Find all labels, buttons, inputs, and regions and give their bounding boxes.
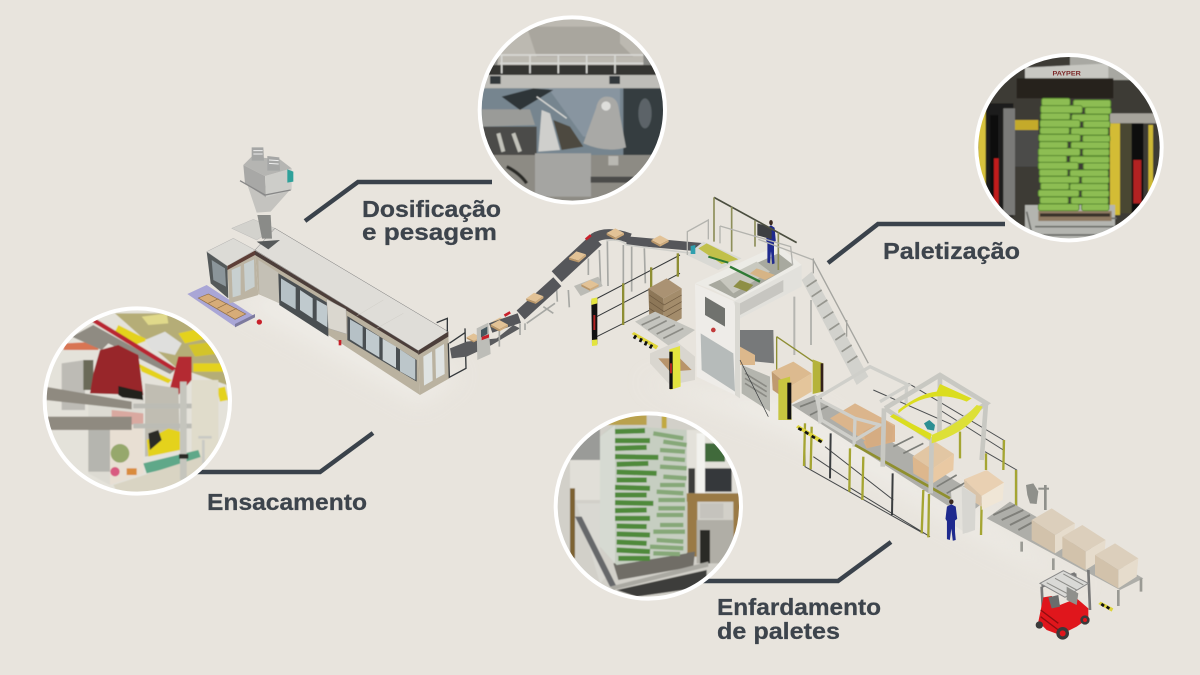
callout: Dosificação e pesagem (305, 182, 501, 245)
photo: bagging line with bags (42, 307, 238, 497)
label: Paletização (883, 238, 1020, 264)
empty pallet stack (648, 278, 682, 328)
label: Dosificação (362, 196, 501, 222)
conveyor section (450, 325, 520, 358)
hazard stripe floor marker (632, 332, 658, 349)
bag on conveyor (492, 317, 509, 329)
control cabinet (951, 486, 976, 534)
label second line: e pesagem (362, 219, 497, 245)
ground shadows (230, 285, 1090, 590)
hazard stripes (796, 425, 823, 443)
enclosure right end face (418, 332, 449, 395)
forklift truck (1036, 570, 1090, 640)
safety fence lower (805, 427, 930, 537)
red sensors (504, 234, 592, 317)
right column bags (650, 433, 687, 554)
top press frame (817, 367, 908, 447)
label second line: de paletes (717, 618, 840, 644)
support legs (499, 240, 645, 347)
grey railing (687, 220, 813, 265)
yellow side rail (855, 445, 950, 498)
upper fence back (870, 367, 1017, 507)
photo border (45, 308, 230, 494)
photo: dosing and weighing machine (477, 13, 670, 210)
bagging and weighing line machine (187, 147, 520, 395)
roof panel seams (357, 300, 403, 328)
belt sections (491, 234, 702, 328)
callout: Enfardamento de paletes (700, 542, 891, 644)
callout: Ensacamento (195, 433, 373, 515)
check weigher control cabinet (477, 323, 491, 360)
leader line (305, 182, 492, 221)
long enclosure wall (255, 251, 420, 395)
long enclosure roof (255, 228, 448, 351)
stretch wrapping and outfeed section (792, 367, 1143, 640)
photo: palletizer with green bags (975, 53, 1165, 243)
palletizer main frame (695, 245, 802, 398)
wrapped load under ring (913, 442, 954, 484)
film wrapped load (964, 470, 1004, 510)
yellow fence posts (804, 423, 1016, 537)
roller conveyor outfeed (987, 502, 1143, 606)
inclined conveyor (491, 197, 868, 420)
operator on platform (766, 220, 776, 264)
leader line (195, 433, 373, 472)
photo border (480, 17, 665, 203)
label: Ensacamento (207, 489, 367, 515)
callout: Paletização (828, 224, 1020, 264)
platform railing (714, 197, 797, 270)
leader line (828, 224, 1005, 263)
dark fence posts (830, 433, 893, 515)
leader line (700, 542, 891, 581)
wrapper tower frame (883, 375, 987, 493)
bags on belt (491, 228, 669, 331)
machine brand plate: PAYPER (1052, 71, 1081, 78)
access stairs (802, 258, 868, 385)
yellow wrapping ring (890, 384, 983, 443)
bag on conveyor (467, 333, 481, 342)
finished pallet loads (1032, 508, 1138, 588)
photo border (556, 413, 741, 599)
hazard floor marker (1098, 602, 1113, 612)
enclosure end face left (207, 238, 258, 303)
roller conveyor main (792, 395, 987, 517)
wrapper motor (924, 420, 935, 431)
dosing hopper and weigher (240, 147, 293, 249)
rear roof block (232, 219, 275, 240)
photo border (976, 55, 1162, 240)
pallet load (614, 426, 687, 566)
safety gate (437, 318, 466, 377)
palletizer safety fence (594, 255, 680, 337)
operator at cabinet (945, 499, 957, 541)
bag pallet load (772, 362, 812, 403)
small pallet table (574, 277, 603, 296)
yellow light curtain posts (778, 359, 823, 420)
stair support post (794, 297, 811, 355)
fence posts (591, 253, 679, 346)
operator panel (757, 223, 772, 239)
bags (1038, 98, 1111, 211)
bag outfeed conveyor (187, 285, 262, 327)
photo: stretch wrapped green pallet (555, 413, 745, 600)
belt side rail (607, 240, 692, 253)
rear labelling robot (1026, 483, 1049, 510)
outfeed rollers and pallet fence (740, 337, 813, 417)
left column bags (615, 431, 658, 558)
label: Enfardamento (717, 594, 881, 620)
upper platform (687, 242, 742, 270)
pallet magazine roller table (635, 312, 695, 385)
first wrap load (830, 403, 895, 448)
light curtain post (669, 346, 681, 390)
